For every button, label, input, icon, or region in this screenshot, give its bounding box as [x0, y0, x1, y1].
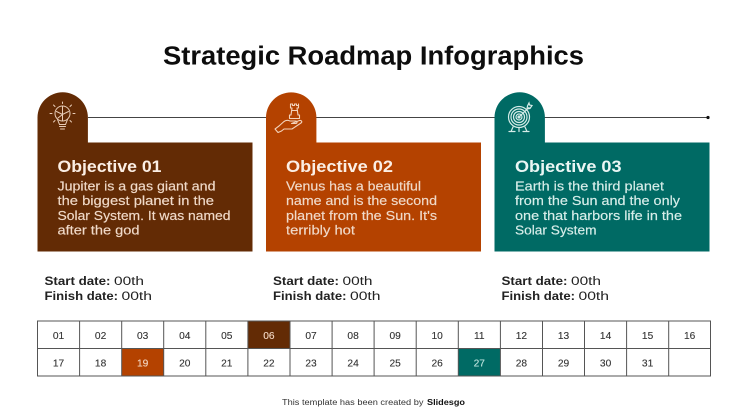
calendar table [38, 321, 710, 376]
dates: objective 01: 00th [114, 274, 144, 288]
dates: objective 01: Finish date: [44, 289, 118, 303]
calendar numbers row 2: 24 [347, 358, 359, 370]
dates: objective 02 [273, 274, 381, 303]
calendar numbers row 2: 27 [474, 358, 485, 370]
dates: objective 01: 00th [122, 289, 152, 303]
panel: objective 02 [266, 92, 481, 251]
highlighted day 27 [458, 348, 500, 376]
dates: objective 01 [44, 274, 152, 303]
text: objective 02 description: name and is the second [286, 194, 437, 208]
calendar numbers row 2: 29 [558, 358, 569, 370]
text: objective 01 description [58, 180, 230, 238]
text: objective 03 description: Earth is the third planet [515, 180, 665, 194]
panel: objective 01 [38, 92, 252, 252]
icon: light bulb [50, 102, 75, 129]
calendar numbers row 1: 09 [390, 331, 401, 342]
calendar numbers row 1: 15 [642, 331, 654, 342]
dates: objective 03: 00th [578, 289, 609, 303]
text: objective 03 description: one that harbors life in the [515, 209, 682, 223]
calendar numbers row 2: 25 [390, 358, 401, 370]
calendar numbers row 2: 22 [263, 358, 275, 370]
calendar numbers row 1: 04 [179, 331, 191, 342]
calendar numbers row 2: 23 [305, 358, 317, 370]
panel shape 01 [38, 92, 252, 252]
highlighted day 06 [248, 321, 290, 348]
calendar numbers row 1: 13 [558, 331, 569, 342]
dates: objective 03: Start date: [502, 274, 568, 288]
calendar numbers row 1: 02 [95, 331, 107, 342]
calendar numbers row 2: 18 [95, 358, 107, 370]
footer credit: Slidesgo [427, 398, 465, 407]
calendar numbers row 2: 19 [137, 358, 149, 370]
timeline line [88, 116, 710, 119]
dates: objective 02: 00th [342, 274, 373, 288]
calendar numbers row 1: 05 [221, 331, 233, 342]
panel shape 02 [266, 92, 481, 251]
dates: objective 03: 00th [571, 274, 601, 288]
heading: objective 01: Objective 01 [58, 157, 162, 176]
calendar grid [38, 321, 710, 376]
calendar numbers row 1: 07 [305, 331, 317, 342]
dates: objective 01: Start date: [44, 274, 110, 288]
text: objective 02 description: Venus has a beautiful [286, 180, 421, 194]
text: objective 01 description: Solar System. It was named [58, 209, 230, 223]
panel shape 03 [494, 92, 710, 252]
calendar numbers row 1: 06 [263, 331, 275, 342]
calendar numbers row 2: 28 [516, 358, 527, 370]
text: objective 02 description [286, 180, 437, 238]
heading: objective 03: Objective 03 [515, 157, 622, 176]
calendar numbers row 2: 17 [53, 358, 64, 370]
calendar numbers row 2: 21 [221, 358, 233, 370]
calendar numbers row 2 [53, 358, 654, 370]
text: objective 01 description: after the god [58, 224, 140, 238]
footer credit: This template has been created by [282, 398, 424, 407]
text: objective 02 description: terribly hot [286, 224, 356, 238]
calendar numbers row 1: 08 [347, 331, 359, 342]
text: objective 01 description: Jupiter is a gas giant and [58, 180, 216, 194]
calendar numbers row 2: 30 [600, 358, 612, 370]
calendar numbers row 1: 10 [432, 331, 443, 342]
dates: objective 02: Finish date: [273, 289, 346, 303]
calendar numbers row 1: 11 [474, 331, 485, 342]
title: Strategic Roadmap Infographics [163, 42, 584, 70]
text: objective 03 description [515, 180, 682, 238]
text: objective 03 description: Solar System [515, 224, 596, 238]
calendar numbers row 1 [53, 331, 696, 342]
icon: target with arrow [508, 103, 532, 132]
text: objective 03 description: from the Sun and the only [515, 194, 681, 208]
footer credit [282, 398, 465, 407]
highlighted day 19 [122, 348, 164, 376]
calendar numbers row 2: 26 [432, 358, 443, 370]
text: objective 01 description: the biggest planet in the [58, 194, 214, 208]
dates: objective 02: 00th [350, 289, 381, 303]
calendar numbers row 1: 16 [684, 331, 696, 342]
text: objective 02 description: planet from the Sun. It's [286, 209, 437, 223]
icon: hand holding chess rook [275, 104, 302, 132]
calendar numbers row 1: 01 [53, 331, 64, 342]
calendar numbers row 1: 03 [137, 331, 149, 342]
calendar numbers row 2: 31 [642, 358, 654, 370]
dates: objective 02: Start date: [273, 274, 339, 288]
heading: objective 02: Objective 02 [286, 157, 393, 176]
dates: objective 03: Finish date: [502, 289, 575, 303]
calendar numbers row 2: 20 [179, 358, 191, 370]
dates: objective 03 [502, 274, 609, 303]
calendar numbers row 1: 12 [516, 331, 527, 342]
panel: objective 03 [494, 92, 710, 252]
calendar numbers row 1: 14 [600, 331, 612, 342]
